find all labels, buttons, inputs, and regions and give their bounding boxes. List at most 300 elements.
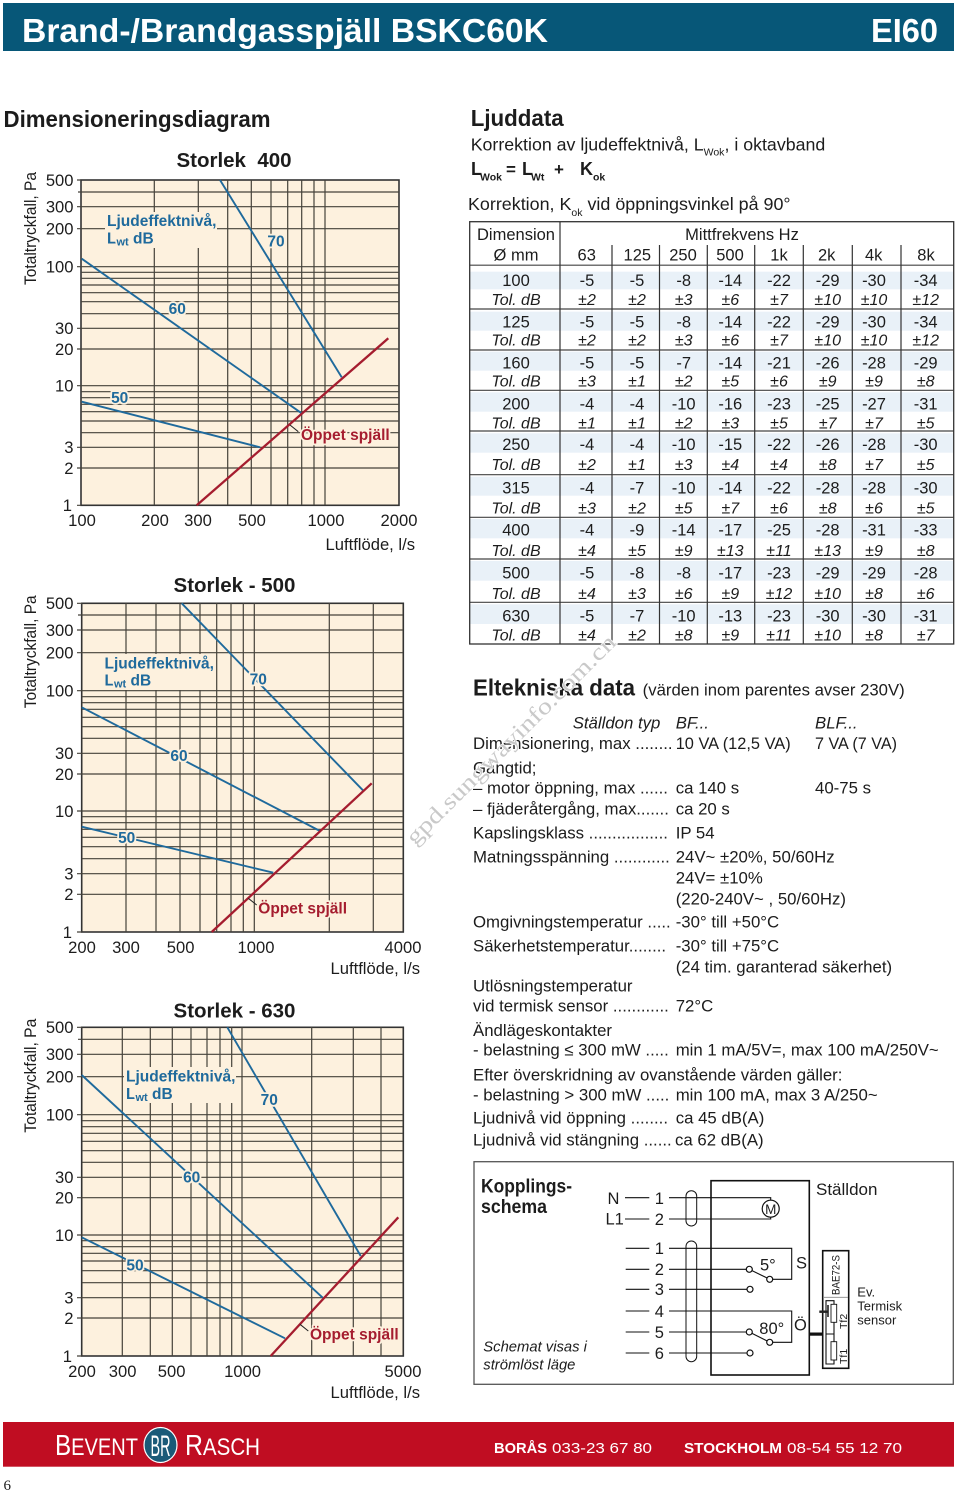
row 500: -28	[914, 565, 938, 583]
note: strömlöst läge: strömlöst läge	[483, 1357, 575, 1373]
terminal wiring: 5	[655, 1324, 664, 1342]
row 500: ±8	[865, 586, 883, 603]
text block: elteknisk data list: Kapslingsklass .................	[473, 823, 668, 842]
logo: Bevent Rasch: RASCH	[185, 1430, 260, 1462]
text block: elteknisk data list: - belastning > 300 mW .....	[473, 1086, 669, 1105]
row 400: ±9	[865, 543, 883, 560]
row 100: ±10	[861, 292, 887, 309]
text block: elteknisk data list: ca 45 dB(A)	[676, 1108, 764, 1127]
row 125: -5	[630, 313, 644, 331]
row 630: ±9	[721, 627, 739, 644]
row 400: -28	[816, 522, 840, 540]
row 500: ±3	[628, 586, 646, 603]
terminal wiring	[606, 1190, 807, 1363]
row 125: 125	[502, 313, 530, 331]
row 100: -22	[767, 272, 791, 290]
row 630: ±8	[675, 627, 693, 644]
text block: elteknisk data list: Efter överskridning av ovanstående värden gäller:	[473, 1066, 842, 1085]
text block: elteknisk data list: - belastning ≤ 300 mW .....	[473, 1041, 669, 1060]
chart: Storlek 630: 70	[261, 1092, 278, 1109]
row 200: -23	[767, 395, 791, 413]
row 200: -4	[580, 395, 594, 413]
text block: elteknisk data list: Omgivningstemperatur .....	[473, 912, 671, 932]
chart: Storlek 400: 30	[55, 319, 74, 338]
chart: Storlek 400: 100	[46, 258, 74, 276]
row 400: -33	[914, 522, 938, 540]
chart: Storlek 500: 200	[46, 644, 74, 662]
row 250: ±1	[628, 457, 646, 474]
row 160	[491, 354, 938, 391]
chart: Storlek 630: Totaltryckfall, Pa	[21, 1018, 40, 1133]
row 250: -4	[630, 436, 644, 454]
row 630: -23	[767, 608, 791, 626]
formula: +	[554, 160, 564, 179]
chart: Storlek 630: Ljudeffektnivå,	[126, 1069, 235, 1086]
line: 60 dB	[82, 1075, 323, 1298]
contact: Stockholm: STOCKHOLM	[684, 1440, 782, 1457]
row 160: -21	[767, 354, 791, 372]
row 315: -30	[914, 479, 938, 497]
formula: Wok	[480, 172, 502, 184]
header bar: Brand-/Brandgasspjäll BSKC60K	[22, 12, 548, 49]
line: 50 dB	[82, 1237, 285, 1338]
row 315: ±6	[770, 500, 788, 517]
chart: Storlek 630: 2	[64, 1309, 74, 1328]
text block: elteknisk data list: – fjäderåtergång, max.......	[473, 799, 669, 818]
table header: 1k	[770, 247, 788, 265]
label: termisk sensor	[857, 1285, 903, 1328]
row 400: ±5	[628, 543, 646, 560]
terminal wiring: 1	[655, 1190, 664, 1208]
row 400: -17	[718, 522, 742, 540]
row 630: ±7	[917, 627, 936, 644]
header bar	[3, 3, 954, 51]
chart: Storlek 630: 5000	[385, 1362, 421, 1381]
thermal sensor BAE72-S	[819, 1251, 850, 1368]
row 315: ±3	[578, 500, 596, 517]
chart: Storlek 630: 60	[183, 1170, 200, 1186]
icon: motor	[762, 1200, 779, 1217]
chart: Storlek 500: 2	[64, 885, 74, 904]
chart: Storlek 400: Luftflöde, l/s	[326, 535, 415, 554]
row 125: -8	[676, 313, 691, 331]
chart: Storlek 400: 100	[68, 511, 96, 530]
row 100: ±2	[628, 292, 646, 309]
row 250: -22	[767, 436, 791, 454]
row 400: Tol. dB	[491, 543, 541, 560]
actuator box	[711, 1181, 809, 1375]
row 100: -14	[718, 272, 742, 290]
chart: Storlek 400: 1000	[308, 511, 344, 530]
text block: elteknisk data list: vid termisk sensor ............	[473, 997, 669, 1016]
line: öppet spjäll	[271, 1217, 398, 1356]
heading: Elteknisk data: Eltekniska data	[473, 674, 635, 700]
row 200: ±1	[578, 415, 596, 432]
row 160: 160	[502, 354, 530, 372]
row 315: ±2	[628, 500, 646, 517]
chart: Storlek 630: 200	[68, 1362, 96, 1381]
label: termisk sensor: sensor	[857, 1313, 897, 1328]
heading: Ljuddata: Ljuddata	[471, 105, 564, 131]
row 400: 400	[502, 522, 530, 540]
table header: 63	[578, 247, 596, 265]
row 500: -29	[862, 565, 886, 583]
row 200: -4	[630, 395, 644, 413]
row 200: ±3	[721, 415, 739, 432]
chart: Storlek 630: 200	[46, 1068, 74, 1086]
chart: Storlek 400	[21, 149, 417, 554]
chart: Storlek 630: 20	[55, 1188, 74, 1208]
text block: elteknisk data list: BLF...	[815, 713, 858, 732]
chart: Storlek 630: 300	[46, 1045, 74, 1064]
note: strömlöst läge	[483, 1340, 588, 1373]
heading: kopplingsschema: Kopplings-	[481, 1176, 572, 1198]
row 125: -22	[767, 313, 791, 331]
text block: elteknisk data list: – motor öppning, max ......	[473, 778, 668, 797]
chart: Storlek 500: L	[104, 673, 114, 690]
thermal sensor BAE72-S: BAE72-S	[830, 1255, 842, 1295]
row 630: -10	[672, 608, 696, 626]
contact: Stockholm	[684, 1440, 902, 1457]
row 315: -22	[767, 479, 791, 497]
row 400: -4	[580, 522, 594, 540]
heading: kopplingsschema	[481, 1176, 572, 1218]
chart: Storlek 400: Totaltryckfall, Pa	[21, 171, 40, 285]
row 250	[491, 436, 938, 474]
row 400: ±11	[766, 543, 792, 560]
row 500: ±9	[721, 586, 739, 603]
text: korrektion vid öppningsvinkel: ok	[571, 207, 583, 219]
heading: Elteknisk data	[473, 674, 905, 700]
text: korrektion: Wok	[704, 147, 725, 159]
row 315: ±5	[675, 500, 693, 517]
chart: Storlek 400: 20	[55, 340, 74, 359]
row 125: -34	[914, 313, 938, 331]
formula: =	[506, 160, 516, 179]
row 500: -8	[630, 565, 644, 583]
row 630: ±4	[578, 627, 596, 644]
row 125	[491, 313, 939, 350]
row 125: -29	[816, 313, 840, 331]
line: öppet spjäll	[212, 783, 372, 932]
header bar: EI60	[871, 12, 938, 49]
text block: elteknisk data list: 72°C	[676, 997, 713, 1016]
contact: Borås	[494, 1440, 652, 1457]
row 200: Tol. dB	[491, 415, 541, 432]
text block: elteknisk data list: Ändlägeskontakter	[473, 1021, 612, 1040]
chart: Storlek 630: Storlek - 630	[174, 1000, 295, 1023]
panel: kopplingsschema	[474, 1162, 953, 1384]
terminal wiring: 3	[655, 1281, 664, 1299]
chart: Storlek 630: L	[126, 1086, 135, 1103]
text block: elteknisk data list: ca 62 dB(A)	[675, 1131, 764, 1150]
chart: Storlek 630: 50	[126, 1258, 144, 1274]
thermal sensor BAE72-S: Tf1	[838, 1349, 850, 1364]
row 250: ±4	[721, 457, 739, 474]
row 315: 315	[502, 479, 530, 497]
chart: Storlek 400: 2	[64, 459, 74, 478]
row 630: ±8	[865, 627, 883, 644]
row 400: ±13	[814, 543, 841, 560]
chart: Storlek 630: Öppet spjäll	[310, 1326, 399, 1343]
chart: Storlek 630: wt	[134, 1092, 148, 1104]
chart: Storlek 500: 30	[55, 744, 74, 763]
terminal wiring: 4	[655, 1303, 664, 1321]
row 200	[491, 395, 938, 432]
text block: elteknisk data list: ca 20 s	[676, 799, 730, 818]
row 315: -4	[580, 479, 594, 497]
formula: Wt	[531, 172, 545, 184]
line: 70 dB	[182, 603, 363, 791]
logo: Bevent Rasch: BR	[150, 1430, 170, 1463]
chart: Storlek 500: 70	[250, 672, 267, 688]
row 125: ±2	[578, 333, 596, 350]
terminal wiring: Ö	[794, 1317, 807, 1335]
row 160: -14	[718, 354, 742, 372]
row 160: ±8	[917, 374, 935, 391]
table header: 8k	[917, 247, 935, 265]
terminal wiring: 1	[655, 1240, 664, 1258]
row 250: ±7	[865, 457, 884, 474]
row 315: Tol. dB	[491, 500, 541, 517]
chart: Storlek 500: 50	[118, 830, 135, 847]
text: korrektion: , i oktavband	[724, 135, 825, 155]
row 160: ±6	[770, 374, 788, 391]
chart: Storlek 500: dB	[126, 673, 151, 690]
row 250: -15	[718, 436, 742, 454]
row 250: ±3	[675, 457, 693, 474]
label: termisk sensor: Termisk	[857, 1299, 903, 1314]
row 250: -4	[580, 436, 594, 454]
logo: Bevent Rasch	[55, 1428, 260, 1463]
row 500: ±6	[675, 586, 693, 603]
row 315	[491, 479, 938, 517]
row 250: -10	[672, 436, 696, 454]
line: 50 dB	[82, 402, 260, 447]
row 160: ±2	[675, 374, 693, 391]
watermark: gpd.sungwayinfo.com.cn	[401, 629, 621, 850]
contact: Stockholm: 08-54 55 12 70	[787, 1440, 902, 1457]
chart: Storlek 630: 500	[158, 1362, 185, 1381]
row 315: ±6	[865, 500, 883, 517]
row 500: Tol. dB	[491, 586, 541, 603]
text block: elteknisk data list: Matningsspänning ............	[473, 847, 670, 866]
chart: Storlek 630: 3	[64, 1288, 74, 1308]
formula: K	[580, 159, 593, 179]
formula	[471, 159, 605, 184]
label: termisk sensor: Ev.	[857, 1285, 875, 1300]
chart: Storlek 500: Storlek - 500	[174, 574, 295, 597]
chart: Storlek 400: 500	[46, 171, 74, 190]
heading: Dimensioneringsdiagram: Dimensioneringsdiagram	[4, 106, 270, 132]
chart: Storlek 400: 70	[267, 234, 285, 250]
row 100: 100	[502, 272, 530, 290]
chart: Storlek 400: Storlek 400	[176, 149, 292, 172]
chart: Storlek 400: wt	[115, 236, 129, 248]
chart: Storlek 400: Ljudeffektnivå,	[107, 213, 216, 230]
chart: Storlek 400: 200	[46, 220, 74, 238]
row 160: -7	[676, 354, 691, 372]
line: 60 dB	[82, 259, 302, 413]
text block: elteknisk data list: 24V= ±10%	[676, 868, 763, 887]
chart: Storlek 500: 300	[112, 938, 140, 957]
row 200: ±7	[865, 415, 884, 432]
row 100: ±3	[675, 292, 693, 309]
chart: Storlek 630: 30	[55, 1168, 74, 1187]
footer bar	[3, 1422, 954, 1467]
text block: elteknisk data list: -30° till +50°C	[676, 912, 779, 932]
row 100: ±12	[912, 292, 939, 309]
row 400: -25	[767, 522, 791, 540]
row 250: ±8	[819, 457, 837, 474]
row 315: -28	[862, 479, 886, 497]
line: 70 dB	[220, 180, 342, 377]
row 100: ±6	[721, 292, 739, 309]
row 400: -14	[672, 522, 696, 540]
row 125: -30	[862, 313, 886, 331]
row 500: 500	[502, 565, 530, 583]
row 630: -5	[580, 608, 594, 626]
text block: elteknisk data list: (220-240V~ , 50/60Hz)	[676, 889, 846, 908]
row 125: -5	[580, 313, 594, 331]
row 125: ±10	[814, 333, 841, 350]
row 500: -29	[816, 565, 840, 583]
chart: Storlek 500: 60	[170, 748, 188, 765]
row 160: ±9	[819, 374, 837, 391]
row 250: Tol. dB	[491, 457, 541, 474]
row 200: -10	[672, 395, 696, 413]
row 200: ±7	[819, 415, 838, 432]
row 400: ±9	[675, 543, 693, 560]
row 200: -25	[816, 395, 840, 413]
thick cable	[809, 1332, 823, 1336]
chart: Storlek 400: 300	[46, 198, 74, 216]
row 315: -7	[630, 479, 644, 497]
row 630: -7	[630, 608, 644, 626]
text: korrektion vid öppningsvinkel: vid öppningsvinkel på 90°	[583, 194, 791, 214]
chart: Storlek 630: 500	[46, 1018, 74, 1037]
text block: elteknisk data list: 10 VA (12,5 VA)	[676, 734, 791, 753]
row 500	[491, 565, 938, 603]
text: korrektion vid öppningsvinkel: Korrektion, K	[468, 194, 571, 214]
row 250: -28	[862, 436, 886, 454]
line: 60 dB	[82, 707, 320, 831]
row 630	[491, 608, 938, 644]
row 630: -30	[862, 608, 886, 626]
chart: Storlek 630: 1000	[224, 1362, 261, 1381]
row 125: ±6	[721, 333, 739, 350]
row 250: ±4	[770, 457, 788, 474]
terminal wiring: 2	[655, 1261, 664, 1279]
row 160: -26	[816, 354, 840, 372]
row 125: ±10	[861, 333, 887, 350]
row 100: Tol. dB	[491, 292, 541, 309]
table header: Dimension	[477, 226, 555, 244]
chart: Storlek 400: 50	[111, 390, 128, 407]
table header: 2k	[818, 247, 836, 265]
row 250: -30	[914, 436, 938, 454]
thermal sensor BAE72-S: Tf2	[838, 1314, 850, 1329]
formula: L	[471, 159, 482, 179]
chart: Storlek 500: 100	[46, 682, 74, 700]
row 500: ±4	[578, 586, 596, 603]
chart: Storlek 400: 60	[169, 301, 186, 318]
row 160: Tol. dB	[491, 374, 541, 391]
row 100: ±7	[770, 292, 789, 309]
chart: Storlek 500: 500	[46, 594, 74, 613]
row 160: -5	[630, 354, 644, 372]
text block: elteknisk data list: Ställdon typ	[573, 713, 660, 732]
chart: Storlek 630: dB	[148, 1086, 173, 1103]
chart: Storlek 500	[21, 574, 421, 978]
row 100: ±10	[814, 292, 841, 309]
table header: 125	[624, 247, 651, 265]
terminal wiring: 80°	[759, 1320, 784, 1338]
row 200: -16	[718, 395, 742, 413]
row 400: ±13	[717, 543, 744, 560]
row 200: ±5	[770, 415, 788, 432]
chart: Storlek 500: 1	[63, 923, 72, 942]
text block: elteknisk data list: Säkerhetstemperatur........	[473, 937, 666, 956]
row 500: ±10	[814, 586, 841, 603]
table header: 4k	[865, 247, 883, 265]
table header: Mittfrekvens Hz	[685, 226, 799, 244]
row 400: -31	[862, 522, 886, 540]
chart: Storlek 400: 300	[184, 511, 212, 530]
logo: Bevent Rasch: BEVENT	[55, 1430, 138, 1462]
chart: Storlek 500: Ljudeffektnivå,	[104, 655, 214, 672]
row 160: ±3	[578, 374, 596, 391]
row 100: -5	[580, 272, 594, 290]
row 100	[491, 272, 939, 309]
terminal wiring: L1	[606, 1210, 624, 1228]
row 125: ±7	[770, 333, 789, 350]
text block: elteknisk data list	[473, 713, 939, 1150]
row 630: ±2	[628, 627, 646, 644]
text block: elteknisk data list: 7 VA (7 VA)	[815, 734, 897, 753]
row 630: ±10	[814, 627, 841, 644]
line: 50 dB	[82, 827, 273, 873]
text block: elteknisk data list: min 1 mA/5V=, max 100 mA/250V~	[676, 1041, 939, 1060]
row 125: Tol. dB	[491, 333, 541, 350]
row 160: ±9	[865, 374, 883, 391]
chart: Storlek 630: 1	[63, 1347, 72, 1366]
text block: elteknisk data list: 24V~ ±20%, 50/60Hz	[676, 847, 835, 866]
chart: Storlek 400: 200	[141, 511, 169, 530]
row 315: -10	[672, 479, 696, 497]
row 630: ±11	[766, 627, 792, 644]
row 100: -29	[816, 272, 840, 290]
text block: elteknisk data list: IP 54	[676, 823, 715, 842]
row 100: -30	[862, 272, 886, 290]
chart: Storlek 500: 4000	[385, 938, 421, 957]
row 200: ±2	[675, 415, 693, 432]
chart: Storlek 500: 3	[64, 864, 74, 884]
text: korrektion: Korrektion av ljudeffektnivå, L	[471, 135, 704, 155]
row 500: -23	[767, 565, 791, 583]
row 250: 250	[502, 436, 530, 454]
chart: Storlek 400: dB	[129, 230, 154, 247]
chart: Storlek 630: 100	[46, 1106, 74, 1124]
row 125: ±12	[912, 333, 939, 350]
row 500: -5	[580, 565, 594, 583]
chart: Storlek 630: Luftflöde, l/s	[331, 1383, 420, 1402]
text block: elteknisk data list: Ljudnivå vid stängning ......	[473, 1131, 672, 1150]
table header: 250	[669, 247, 697, 265]
chart: Storlek 500: 20	[55, 765, 74, 784]
row 125: ±2	[628, 333, 646, 350]
terminal wiring: N	[608, 1190, 619, 1208]
